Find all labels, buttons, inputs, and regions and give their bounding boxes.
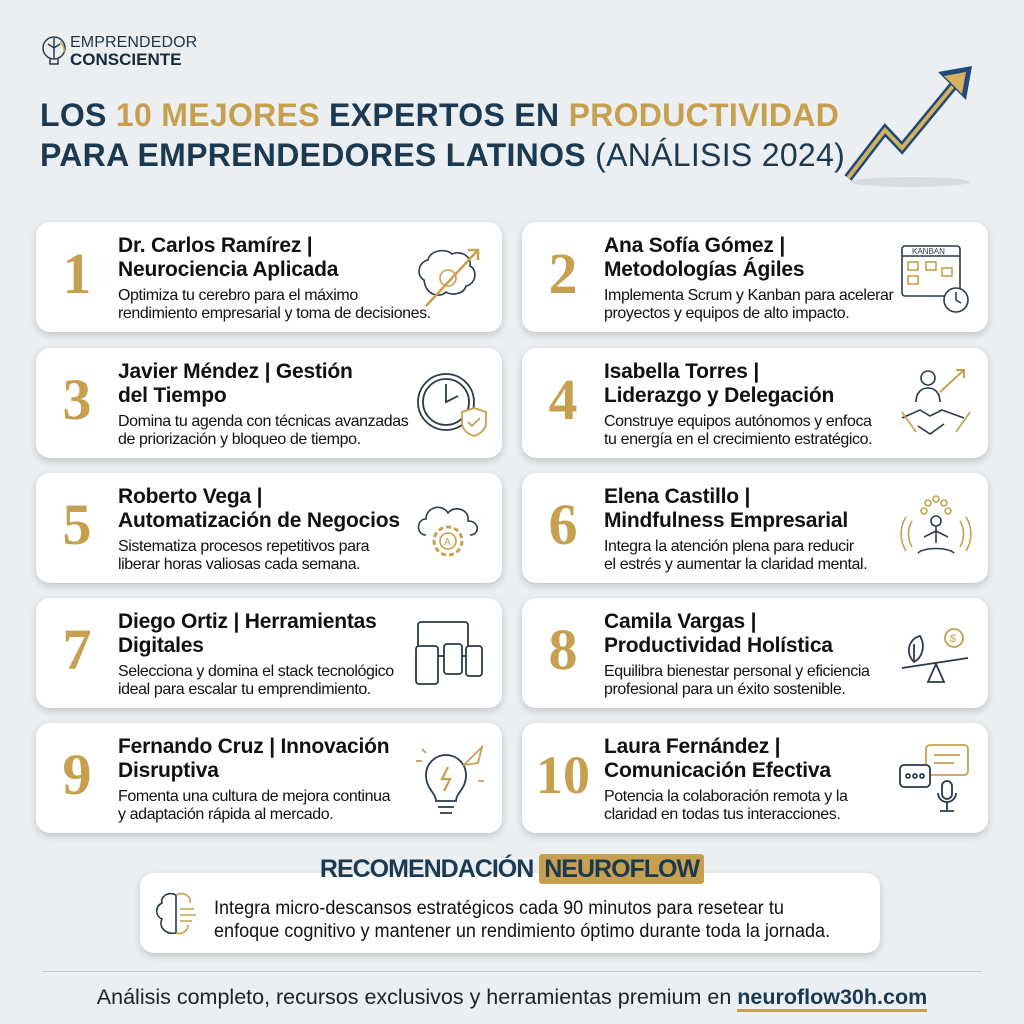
title xyxy=(40,97,845,173)
card 7: 7 xyxy=(62,617,92,682)
card 8: 8 xyxy=(548,617,578,682)
card 5: Roberto Vega | xyxy=(118,485,262,508)
logo: CONSCIENTE xyxy=(70,50,181,69)
card 6: Elena Castillo | xyxy=(604,485,750,508)
card 7: Diego Ortiz | Herramientas xyxy=(118,610,377,633)
card 4: Liderazgo y Delegación xyxy=(604,384,834,407)
card 9: Fernando Cruz | Innovación xyxy=(118,735,389,758)
card 5 xyxy=(36,473,502,583)
card 4: Isabella Torres | xyxy=(604,360,759,383)
card 6: Mindfulness Empresarial xyxy=(604,509,848,532)
card 2 xyxy=(522,222,988,332)
card 10: Laura Fernández | xyxy=(604,735,780,758)
card 3: del Tiempo xyxy=(118,384,226,407)
card 10: Potencia la colaboración remota y la xyxy=(604,788,848,805)
icon: devices xyxy=(415,621,483,685)
icon: brain gear xyxy=(418,248,480,307)
logo: EMPRENDEDOR xyxy=(70,34,197,51)
title: LOS 10 MEJORES EXPERTOS EN PRODUCTIVIDAD xyxy=(40,97,839,133)
card 1 xyxy=(36,222,502,332)
icon: bulb rocket xyxy=(416,744,484,814)
card 3 xyxy=(36,348,502,458)
logo xyxy=(42,34,197,69)
text xyxy=(214,898,830,942)
card 7: Selecciona y domina el stack tecnológico xyxy=(118,663,394,680)
card 8 xyxy=(522,598,988,708)
card 10: claridad en todas tus interacciones. xyxy=(604,806,840,823)
card 1: rendimiento empresarial y toma de decisiones. xyxy=(118,305,431,322)
card 4: Construye equipos autónomos y enfoca xyxy=(604,413,872,430)
card 5: Automatización de Negocios xyxy=(118,509,400,532)
card 6: Integra la atención plena para reducir xyxy=(604,538,854,555)
card 7: ideal para escalar tu emprendimiento. xyxy=(118,681,371,698)
card 9 xyxy=(36,723,502,833)
card 8: Camila Vargas | xyxy=(604,610,756,633)
card 5: liberar horas valiosas cada semana. xyxy=(118,556,360,573)
card 9: Disruptiva xyxy=(118,759,219,782)
card 1: Optimiza tu cerebro para el máximo xyxy=(118,287,358,304)
card 2: Ana Sofía Gómez | xyxy=(604,234,785,257)
icon: meditation xyxy=(900,495,972,554)
icon: brain xyxy=(156,892,196,934)
card 3: Javier Méndez | Gestión xyxy=(118,360,353,383)
icon: balance: $ xyxy=(950,633,956,645)
card 2: Implementa Scrum y Kanban para acelerar xyxy=(604,287,893,304)
card 10: 10 xyxy=(536,745,590,805)
card 8: profesional para un éxito sostenible. xyxy=(604,681,845,698)
title: PARA EMPRENDEDORES LATINOS (ANÁLISIS 2024) xyxy=(40,137,845,173)
card 1: Dr. Carlos Ramírez | xyxy=(118,234,312,257)
icon: leader handshake xyxy=(901,369,971,435)
card 8: Productividad Holística xyxy=(604,634,833,657)
text: Integra micro-descansos estratégicos cada 90 minutos para resetear tu xyxy=(214,898,784,919)
card 2: 2 xyxy=(548,241,578,306)
card 6: el estrés y aumentar la claridad mental. xyxy=(604,556,867,573)
card 2: Metodologías Ágiles xyxy=(604,258,804,281)
icon: kanban board xyxy=(901,245,969,313)
card 9: 9 xyxy=(62,742,92,807)
icon: cloud gear: A xyxy=(444,537,451,548)
icon: brain bulb xyxy=(42,36,66,65)
card 8: Equilibra bienestar personal y eficiencia xyxy=(604,663,870,680)
card 1: 1 xyxy=(62,241,92,306)
icon: chat mic xyxy=(899,744,969,812)
icon: balance xyxy=(902,628,968,683)
card 3: de priorización y bloqueo de tiempo. xyxy=(118,431,361,448)
card 7: Digitales xyxy=(118,634,204,657)
recommendation heading: RECOMENDACIÓN NEUROFLOW xyxy=(320,855,699,883)
card 4: tu energía en el crecimiento estratégico. xyxy=(604,431,872,448)
text: enfoque cognitivo y mantener un rendimiento óptimo durante toda la jornada. xyxy=(214,921,830,942)
card 7 xyxy=(36,598,502,708)
card 3: 3 xyxy=(62,367,92,432)
card 10 xyxy=(522,723,988,833)
card 6 xyxy=(522,473,988,583)
card 9: Fomenta una cultura de mejora continua xyxy=(118,788,390,805)
card 6: 6 xyxy=(548,492,578,557)
icon: kanban board: KANBAN xyxy=(912,247,945,256)
icon: cloud gear xyxy=(418,506,478,556)
card 10: Comunicación Efectiva xyxy=(604,759,831,782)
card 5: Sistematiza procesos repetitivos para xyxy=(118,538,369,555)
card 1: Neurociencia Aplicada xyxy=(118,258,338,281)
card 4 xyxy=(522,348,988,458)
card 5: 5 xyxy=(62,492,92,557)
icon: rising arrow xyxy=(844,66,972,187)
recommendation box xyxy=(140,873,880,953)
footer: Análisis completo, recursos exclusivos y herramientas premium en neuroflow30h.com xyxy=(97,985,927,1009)
card 3: Domina tu agenda con técnicas avanzadas xyxy=(118,413,408,430)
card 9: y adaptación rápida al mercado. xyxy=(118,806,333,823)
card 2: proyectos y equipos de alto impacto. xyxy=(604,305,849,322)
icon: clock shield xyxy=(417,373,487,437)
card 4: 4 xyxy=(548,367,578,432)
